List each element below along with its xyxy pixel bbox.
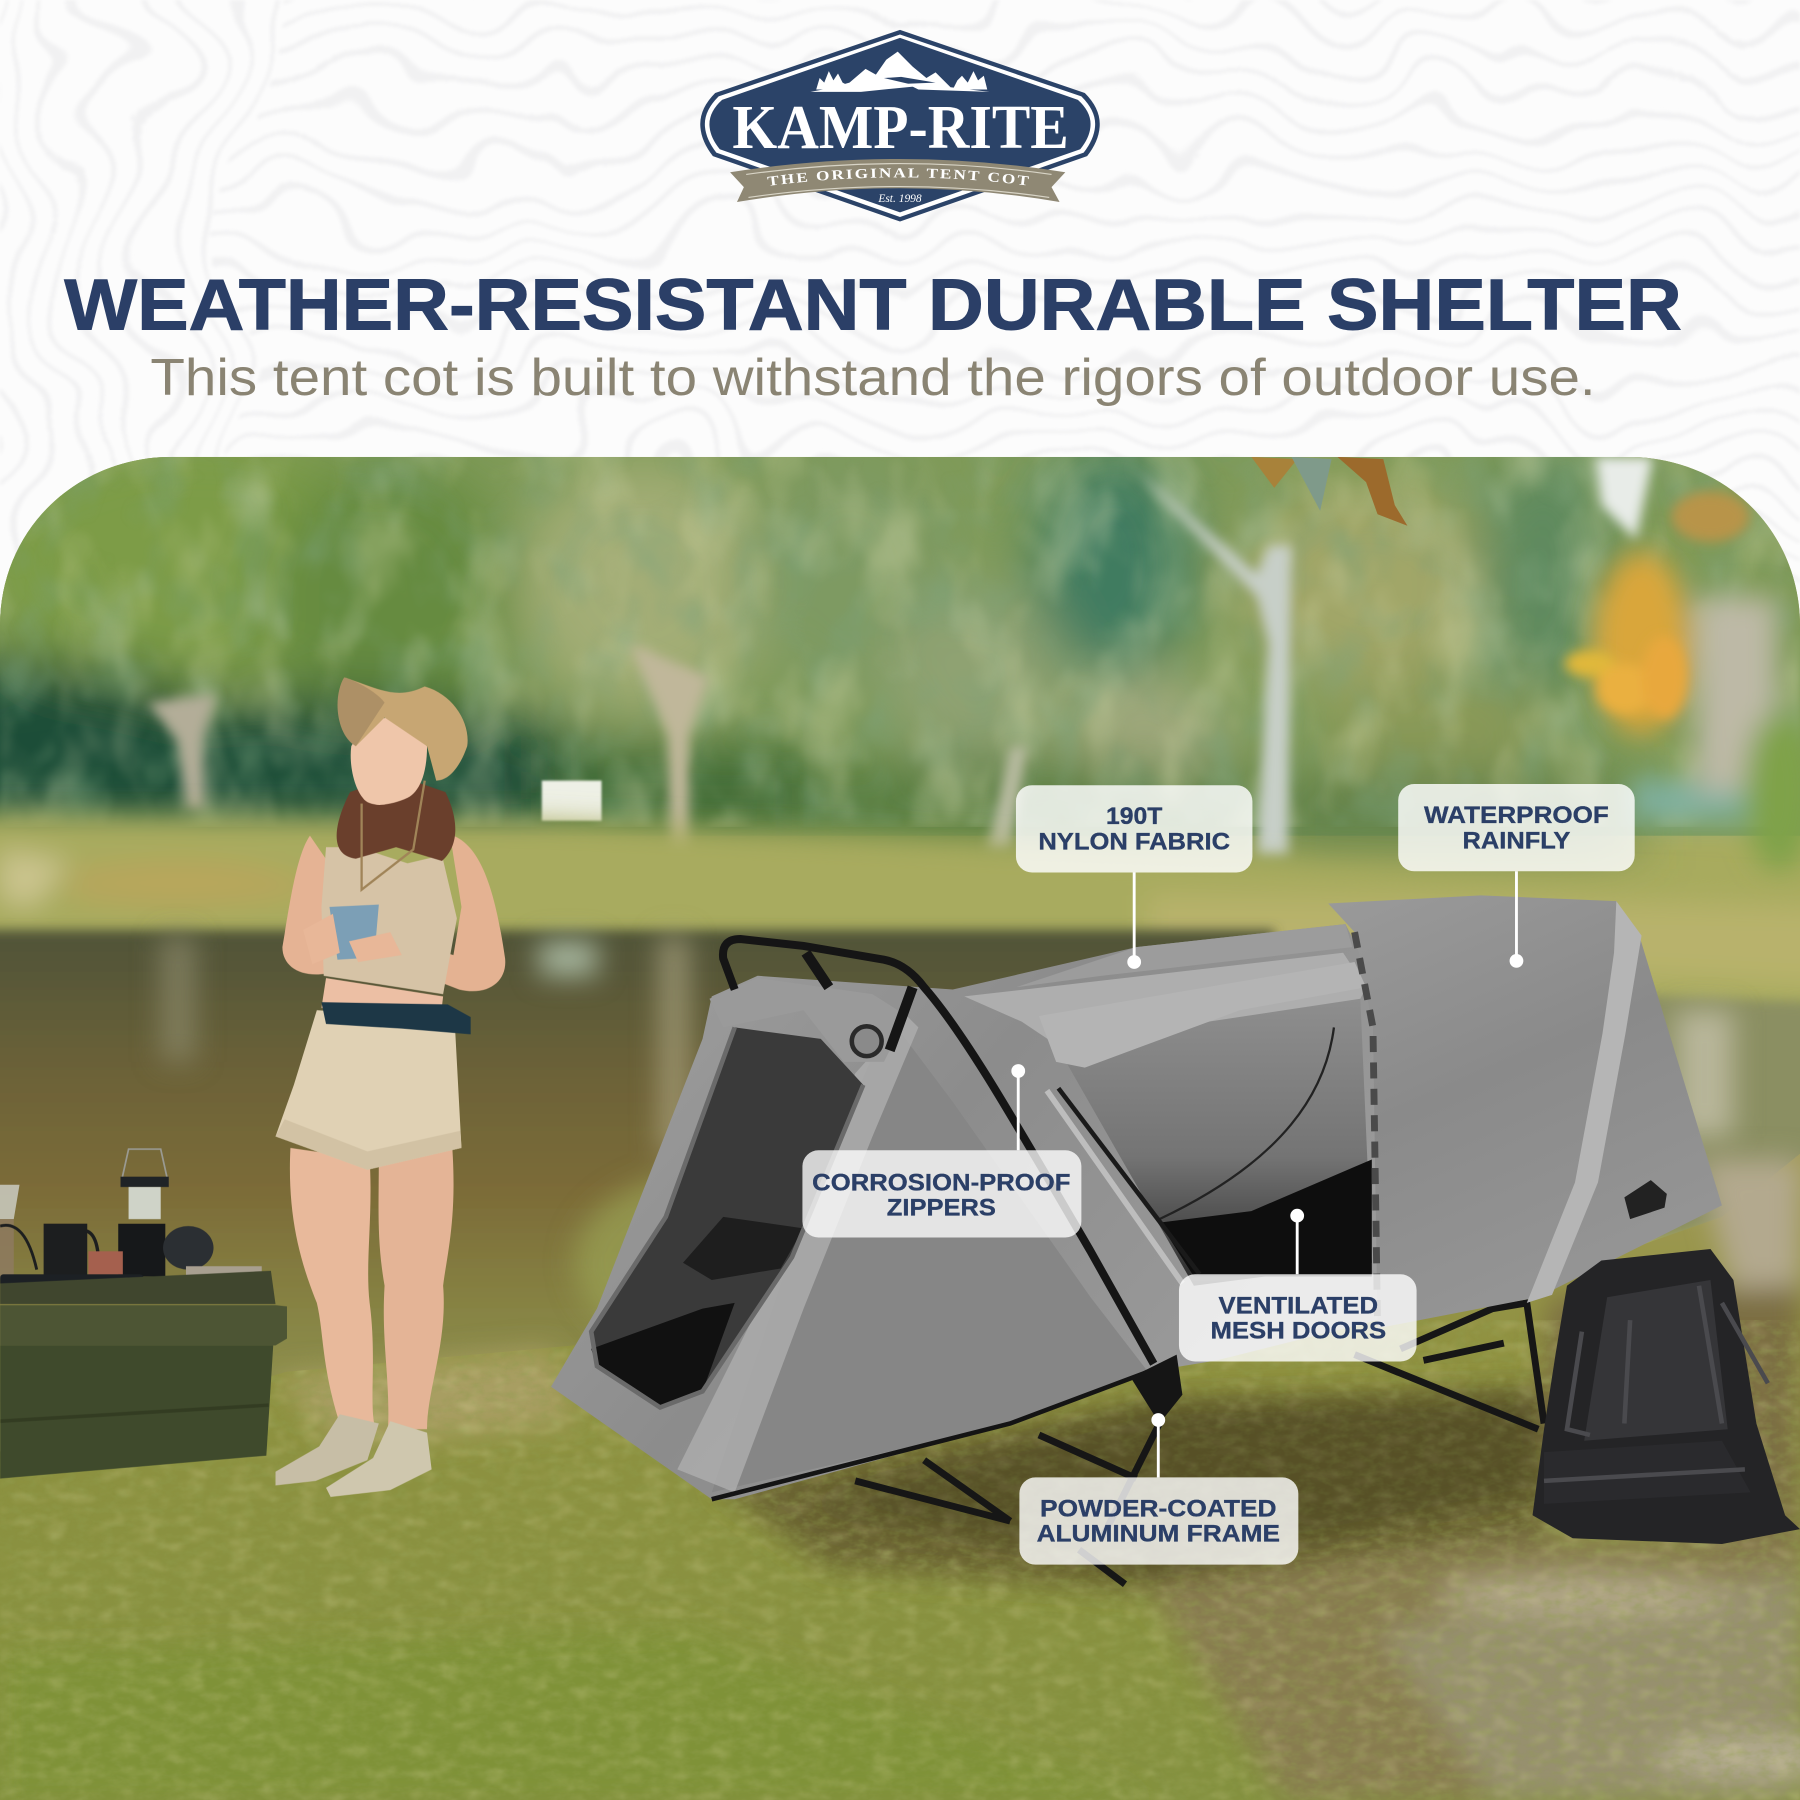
sun hat [338, 677, 468, 781]
title: WEATHER-RESISTANT DURABLE SHELTER [64, 265, 1682, 345]
logo ribbon: THE ORIGINAL TENT COT [767, 168, 1029, 186]
callout: 190T nylon fabric [1016, 785, 1252, 969]
callout: 190T nylon fabric: 190T [1106, 803, 1163, 830]
tent cot [551, 895, 1722, 1584]
tree line background [0, 436, 1800, 872]
callout: waterproof rainfly: WATERPROOF [1424, 802, 1609, 829]
far grass bank [0, 813, 1800, 1022]
cot legs [855, 1303, 1544, 1584]
callout: ventilated mesh doors: MESH DOORS [1211, 1318, 1386, 1345]
callout: corrosion-proof zippers: CORROSION-PROOF [812, 1169, 1070, 1196]
tent body [551, 924, 1378, 1499]
rainfly logo patch [1624, 1180, 1667, 1219]
logo mountains [810, 52, 990, 92]
door zipper trim [591, 1027, 863, 1407]
background: topographic pattern [0, 0, 1800, 712]
callout: ventilated mesh doors [1179, 1209, 1417, 1361]
callout: waterproof rainfly [1398, 784, 1635, 968]
tent base rail [712, 1372, 1148, 1499]
foreground grass and dirt [0, 1154, 1800, 1800]
tent shadow [804, 1395, 1550, 1573]
hanging leaves [1251, 457, 1407, 526]
mesh door [591, 1027, 863, 1407]
legs [290, 1148, 374, 1423]
callout: waterproof rainfly: RAINFLY [1463, 827, 1570, 854]
rainfly [1328, 895, 1722, 1328]
hair [337, 775, 455, 861]
boots [276, 1414, 379, 1485]
storage box with camping gear [0, 1149, 287, 1479]
hands [303, 914, 402, 964]
black hoop frame [723, 939, 1154, 1364]
logo ribbon [730, 159, 1066, 202]
mug [329, 905, 379, 960]
body shading [677, 924, 1372, 1492]
camping gear [0, 1149, 262, 1290]
callout: 190T nylon fabric: NYLON FABRIC [1038, 828, 1230, 855]
woman holding a mug [276, 677, 505, 1497]
midriff [321, 978, 443, 1016]
neck strap [362, 781, 425, 890]
pond [0, 930, 1800, 1412]
photo: lakeside scene [0, 436, 1800, 1800]
rolled flap [709, 978, 907, 1062]
logo wordmark: KAMP-RITE [732, 94, 1069, 162]
logo: Kamp-Rite [700, 30, 1100, 222]
callout: powder-coated aluminum frame [1019, 1413, 1298, 1565]
logo established date: Est. 1998 [877, 193, 922, 205]
backpack [1533, 1249, 1800, 1544]
subtitle: This tent cot is built to withstand the rigors of outdoor use. [150, 348, 1596, 406]
callout: corrosion-proof zippers: ZIPPERS [887, 1195, 996, 1222]
rainfly edge tabs [1355, 932, 1378, 1326]
arms [282, 836, 335, 974]
face [351, 717, 427, 805]
sign [542, 781, 602, 821]
callout: powder-coated aluminum frame: POWDER-COATED [1040, 1495, 1277, 1522]
callout: corrosion-proof zippers [802, 1064, 1081, 1238]
callout: powder-coated aluminum frame: ALUMINUM FRAME [1037, 1521, 1280, 1548]
tank top [321, 847, 457, 994]
callout: ventilated mesh doors: VENTILATED [1219, 1292, 1378, 1319]
belt [321, 1002, 471, 1034]
shorts [276, 1010, 461, 1170]
